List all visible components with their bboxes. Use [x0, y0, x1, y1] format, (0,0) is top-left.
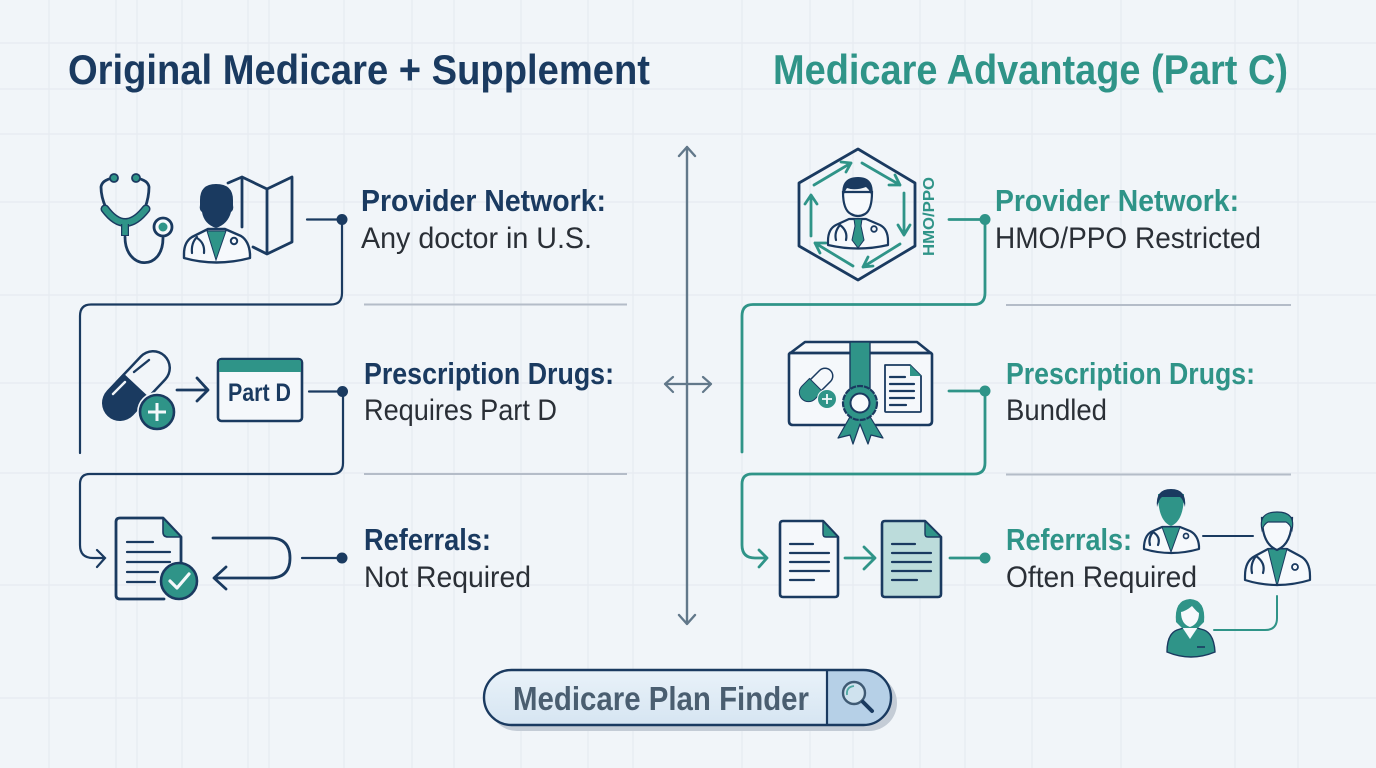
icon: document with check [116, 518, 197, 599]
icon: folded map [228, 177, 292, 254]
search bar: Medicare Plan Finder [484, 670, 897, 731]
text: referrals: Referrals: [364, 522, 491, 557]
text: provider network: Any doctor in U.S. [361, 222, 592, 255]
icon: Part D card [218, 359, 302, 421]
arrow: document to document [845, 547, 875, 569]
text: provider network: HMO/PPO Restricted [995, 222, 1261, 255]
text: prescription drugs: Requires Part D [364, 394, 557, 427]
text: provider network [361, 183, 606, 255]
icon: doctor silhouette [184, 184, 250, 262]
label: Medicare Plan Finder [513, 680, 809, 717]
divider [1006, 474, 1291, 476]
mini document [885, 365, 921, 412]
connector: referrals [950, 552, 990, 564]
connector: doctor to specialist [1203, 535, 1253, 537]
icon: referral document [780, 521, 838, 597]
text: prescription drugs: Prescription Drugs: [364, 356, 614, 391]
icon: Part D card: Part D [228, 379, 291, 407]
text: prescription drugs: Prescription Drugs: [1006, 356, 1255, 391]
icon: stethoscope [101, 174, 172, 263]
text: provider network [995, 183, 1261, 255]
icon: specialist doctor [1245, 512, 1310, 586]
connector: referrals [302, 552, 348, 564]
arrow: return loop [213, 538, 290, 589]
arrow: capsule to Part D [177, 378, 208, 401]
connector: prescription to referrals row [80, 386, 348, 567]
connector: provider network to prescription row [80, 214, 348, 453]
icon: approved document [882, 521, 941, 597]
icon: nurse [1167, 599, 1215, 657]
panel: medicare advantage column [742, 149, 1310, 657]
icon: capsule with plus [103, 360, 177, 432]
icon: bundled package with ribbon [789, 342, 932, 444]
icon: primary doctor [1144, 489, 1199, 553]
heading: Original Medicare + Supplement: Original Medicare + Supplement [68, 46, 650, 93]
icon: HMO/PPO network hexagon [799, 149, 938, 280]
label: HMO/PPO: HMO/PPO [921, 177, 938, 256]
panel: original medicare column [80, 174, 627, 599]
connector: provider network to prescription row [742, 214, 990, 452]
icon: magnifying glass [843, 682, 872, 711]
text: referrals [364, 522, 531, 594]
divider arrow: vertical [679, 147, 695, 624]
text: referrals: Often Required [1006, 561, 1197, 594]
text: referrals: Not Required [364, 561, 531, 594]
text: prescription drugs: Bundled [1006, 394, 1107, 427]
text: provider network: Provider Network: [361, 183, 606, 218]
heading: Medicare Advantage (Part C): Medicare Advantage (Part C) [773, 46, 1288, 93]
divider [364, 473, 627, 475]
text: referrals: Referrals: [1006, 522, 1132, 557]
divider [1006, 304, 1291, 306]
text: referrals [1006, 522, 1197, 594]
text: provider network: Provider Network: [995, 183, 1239, 218]
divider arrow: horizontal [665, 377, 711, 392]
text: prescription drugs [364, 356, 614, 427]
text: prescription drugs [1006, 356, 1255, 427]
doctor bust [828, 177, 888, 248]
divider [364, 304, 627, 306]
mini capsule [799, 376, 836, 408]
connector: specialist to nurse [1214, 596, 1277, 630]
connector: prescription to referrals row [742, 386, 990, 567]
